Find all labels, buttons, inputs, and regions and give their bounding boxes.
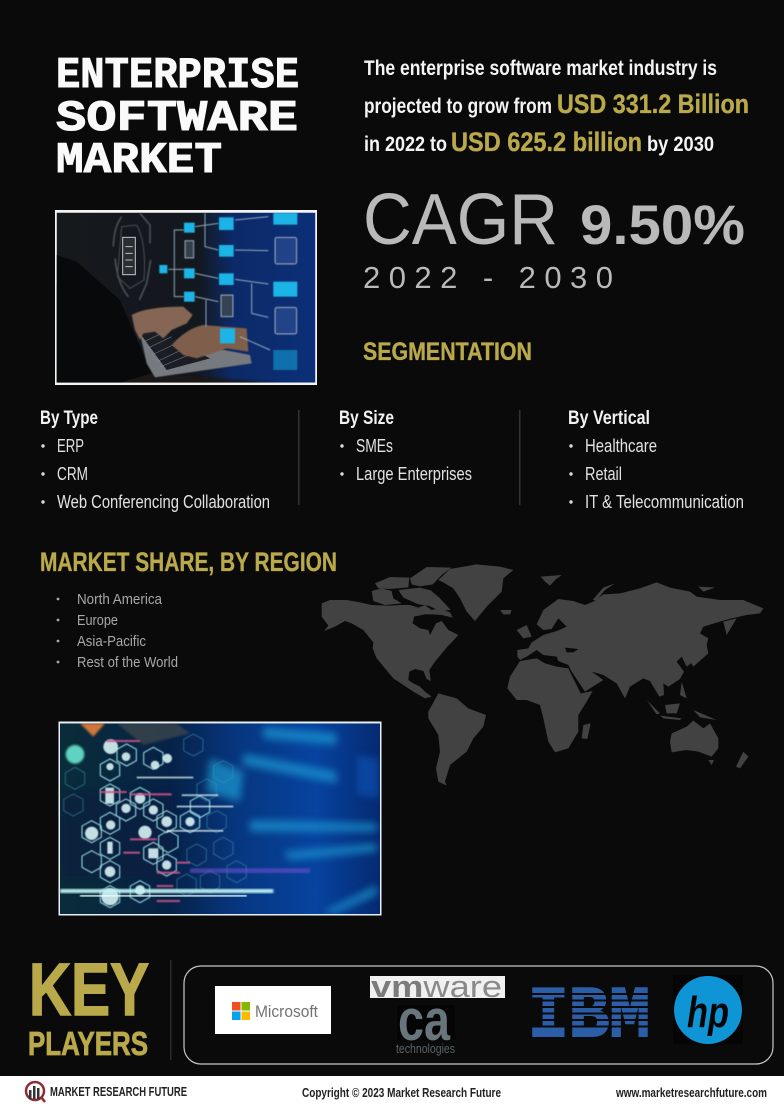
key players heading: KEY xyxy=(29,948,149,1031)
segmentation heading: SEGMENTATION xyxy=(363,338,532,366)
region list: Rest of the World xyxy=(77,654,178,671)
CAGR figure: 2022 - 2030 xyxy=(363,260,613,295)
footer bar xyxy=(0,1076,784,1108)
segment column: by size xyxy=(339,408,472,484)
region list: North America xyxy=(77,591,163,608)
world map xyxy=(322,564,763,786)
title: ENTERPRISE xyxy=(56,51,299,101)
segment column: by vertical: IT & Telecommunication xyxy=(585,492,744,512)
region list: Asia-Pacific xyxy=(77,633,146,650)
logo: CA Technologies: technologies xyxy=(396,1041,455,1056)
segment column: by type: ERP xyxy=(57,436,84,456)
footer logo icon xyxy=(26,1082,45,1102)
region list xyxy=(57,591,178,671)
market summary text xyxy=(364,57,749,157)
title: SOFTWARE xyxy=(56,94,298,144)
segment column: by vertical: By Vertical xyxy=(568,408,650,429)
segment column: by size: By Size xyxy=(339,408,394,429)
segment column: by type: CRM xyxy=(57,464,88,484)
key players heading: PLAYERS xyxy=(28,1025,148,1062)
segment column: by vertical: Retail xyxy=(585,464,622,484)
title xyxy=(56,51,299,186)
market share heading: MARKET SHARE, BY REGION xyxy=(40,547,337,577)
logo: VMware: vmware xyxy=(371,969,502,1004)
footer brand name: MARKET RESEARCH FUTURE xyxy=(50,1084,187,1099)
segment column: by type xyxy=(40,408,270,512)
segment column: by type: Web Conferencing Collaboration xyxy=(57,492,270,512)
title: MARKET xyxy=(56,136,222,186)
CAGR figure: 9.50% xyxy=(580,193,745,256)
logo: Microsoft: Microsoft xyxy=(255,1002,318,1021)
footer copyright: Copyright © 2023 Market Research Future xyxy=(302,1085,501,1100)
market summary text: by 2030 xyxy=(647,133,714,156)
logo: IBM: IBM xyxy=(528,976,650,1058)
market summary text: USD 331.2 Billion xyxy=(557,89,749,119)
key players heading xyxy=(28,948,149,1062)
market summary text: The enterprise software market industry is xyxy=(364,57,717,80)
market summary text: projected to grow from xyxy=(364,95,552,118)
photo: digital icons and code xyxy=(58,722,382,916)
logo: HP: hp xyxy=(687,988,729,1037)
logo: Microsoft xyxy=(215,986,331,1034)
logo: HP xyxy=(673,975,743,1044)
region list: Europe xyxy=(77,612,118,629)
CAGR figure: CAGR xyxy=(363,180,558,260)
segment column: by size: Large Enterprises xyxy=(356,464,472,484)
segment column: by vertical: Healthcare xyxy=(585,436,657,456)
key players panel xyxy=(184,966,773,1064)
segment column: by size: SMEs xyxy=(356,436,393,456)
segment column: by vertical xyxy=(568,408,744,512)
photo: hands on laptop with file network xyxy=(55,210,317,385)
market summary text: USD 625.2 billion xyxy=(451,127,642,157)
market summary text: in 2022 to xyxy=(364,133,447,156)
CAGR figure xyxy=(363,180,745,295)
segment column: by type: By Type xyxy=(40,408,98,429)
logo: CA Technologies: ca xyxy=(398,988,451,1053)
